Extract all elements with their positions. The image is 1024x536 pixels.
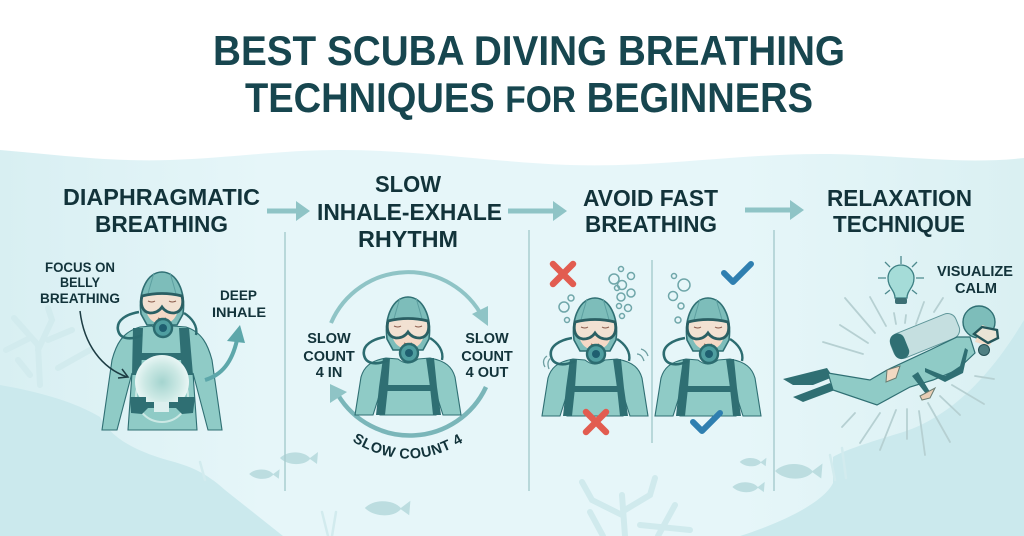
arrows between steps — [267, 200, 804, 221]
heading: SLOW — [375, 171, 441, 197]
title — [213, 27, 845, 121]
label: visualize calm: VISUALIZE — [937, 264, 1013, 280]
label: deep inhale: DEEP — [220, 288, 257, 303]
label: focus on belly breathing — [40, 260, 120, 306]
label: slow count 4 out: COUNT — [461, 349, 513, 365]
background corals — [6, 308, 846, 536]
heading: RELAXATION — [827, 185, 972, 211]
label: focus on belly breathing: BELLY — [60, 275, 100, 290]
heading: BREATHING — [95, 211, 228, 237]
breathing cycle arrows — [330, 272, 488, 436]
title: BEST SCUBA DIVING BREATHING — [213, 27, 845, 74]
icon: light bulb — [878, 256, 924, 304]
title: TECHNIQUES FOR BEGINNERS — [245, 74, 813, 121]
heading: RHYTHM — [358, 226, 458, 252]
label: visualize calm — [937, 264, 1013, 297]
label: focus on belly breathing: BREATHING — [40, 291, 120, 306]
heading — [827, 185, 972, 237]
diver — [355, 297, 461, 415]
heading: INHALE-EXHALE — [317, 199, 502, 225]
heading — [63, 184, 260, 237]
dividers — [285, 230, 774, 491]
heading — [583, 185, 718, 237]
label: slow count 4 in: COUNT — [303, 349, 355, 365]
icon: red cross bottom — [586, 412, 606, 432]
label: slow count 4 in: SLOW — [307, 331, 351, 347]
label: slow count 4 curved: SLOW COUNT 4 — [354, 434, 462, 459]
fish — [249, 452, 822, 515]
panel: relaxation technique — [783, 185, 1013, 455]
heading: DIAPHRAGMATIC — [63, 184, 260, 210]
arrow: to belly — [80, 311, 128, 378]
label: slow count 4 out: SLOW — [465, 331, 509, 347]
diver: calm breathing — [655, 298, 761, 416]
diver: fast breathing — [542, 298, 648, 416]
label: slow count 4 in — [303, 331, 355, 381]
icon: red cross top — [553, 264, 573, 284]
label: focus on belly breathing: FOCUS ON — [45, 260, 115, 275]
diver with belly glow — [102, 272, 222, 430]
heading: AVOID FAST — [583, 185, 718, 211]
bubbles: calm — [668, 274, 690, 323]
panel: slow inhale-exhale rhythm — [303, 171, 513, 459]
label: slow count 4 out — [461, 331, 513, 381]
label: deep inhale — [212, 288, 266, 320]
calm rays — [823, 297, 994, 455]
panel: diaphragmatic breathing — [40, 184, 266, 430]
label: visualize calm: CALM — [955, 281, 997, 297]
heading: BREATHING — [585, 211, 717, 237]
swimming diver — [783, 306, 998, 405]
icon: blue check top — [724, 264, 751, 282]
label: slow count 4 out: 4 OUT — [466, 365, 508, 381]
panel: avoid fast breathing — [542, 185, 761, 432]
icon: blue check bottom — [693, 413, 720, 431]
heading: TECHNIQUE — [833, 211, 965, 237]
label: slow count 4 in: 4 IN — [316, 365, 342, 381]
label: deep inhale: INHALE — [212, 305, 266, 320]
heading — [317, 171, 502, 252]
bubbles: fast — [559, 266, 635, 322]
arrow: deep inhale — [205, 325, 245, 380]
